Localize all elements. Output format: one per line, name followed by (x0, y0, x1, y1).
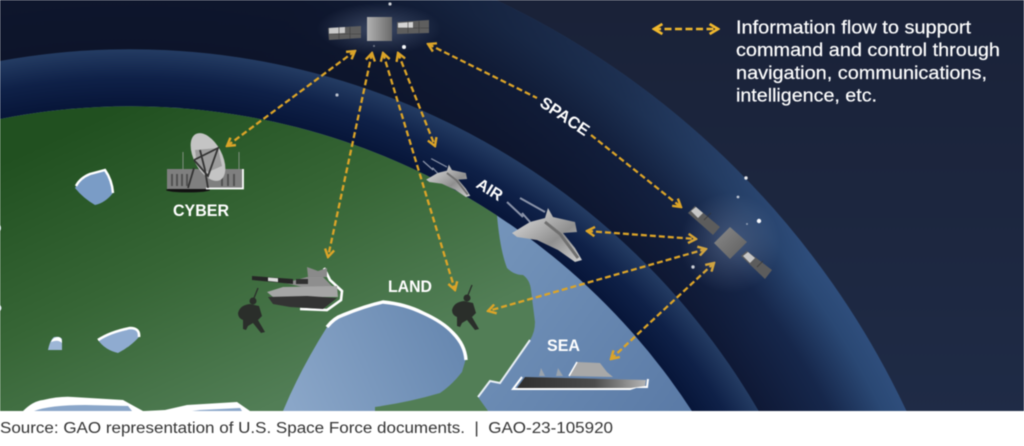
air layer band (0, 49, 759, 411)
icon: aircraft small (423, 159, 470, 197)
label: air: AIR (473, 176, 506, 205)
legend text: intelligence, etc. (736, 84, 877, 106)
legend arrow (654, 28, 718, 30)
land mass (0, 106, 535, 411)
icon: aircraft large (507, 198, 582, 262)
legend (654, 16, 1000, 106)
tank barrel (252, 276, 308, 284)
icon: soldier right (452, 285, 479, 330)
label: land: LAND (388, 277, 432, 296)
edge ice (0, 225, 2, 311)
arrow: satellite to aircraft (398, 53, 435, 146)
sea (0, 106, 692, 411)
arrow: satellite to cyber (227, 51, 355, 146)
right solar panel (397, 20, 429, 34)
satellite body (714, 227, 747, 259)
ship masts (539, 368, 563, 376)
legend text: command and control through (736, 39, 1000, 60)
stars (335, 2, 761, 269)
building (167, 169, 243, 189)
arrow: satellite to tank (328, 53, 372, 257)
source line: Source: GAO representation of U.S. Space Force documents. | GAO-23-105920 (0, 420, 613, 437)
arrow: satellite to ship (611, 263, 714, 359)
tank cupola (307, 267, 327, 277)
label: sea: SEA (547, 336, 580, 355)
lower solar panel (741, 251, 772, 279)
label: space: SPACE (536, 94, 593, 140)
arrow: satellite to satellite, upper part (428, 44, 537, 98)
lake 1 (75, 170, 113, 205)
icon: top satellite (317, 3, 441, 55)
ship superstructure (569, 362, 613, 377)
dish (183, 127, 233, 187)
satellite body (367, 17, 392, 41)
left solar panel (328, 26, 361, 40)
lake 3 (98, 328, 139, 353)
arrow: satellite to satellite, lower part (591, 135, 681, 207)
label: cyber: CYBER (173, 201, 229, 220)
arrow: satellite to soldier two (488, 249, 706, 311)
southern ice shelves (23, 397, 250, 411)
icon: tank (252, 267, 342, 310)
tank hull (267, 286, 338, 297)
upper solar panel (688, 206, 720, 235)
ship hull (517, 377, 646, 388)
lake 2 (48, 337, 62, 350)
icon: right satellite (680, 193, 780, 293)
tank outline (300, 268, 342, 310)
arrow: satellite to soldier (383, 53, 455, 290)
tank turret (285, 277, 333, 288)
icon: soldier left (238, 288, 265, 333)
legend text: navigation, communications, (736, 62, 987, 83)
antenna masts (183, 152, 239, 170)
information flow arrows (227, 51, 714, 359)
arrow: satellite to aircraft two (587, 231, 696, 239)
ground shadow (166, 188, 210, 192)
dish frame (188, 148, 218, 188)
legend text: Information flow to support (736, 16, 971, 38)
tank tracks (268, 296, 337, 309)
footer band (0, 411, 1024, 446)
legend text (736, 16, 1000, 106)
icon: ship (513, 362, 648, 389)
icon: satellite dish (166, 127, 243, 192)
dish interior (195, 148, 222, 172)
bay (283, 302, 467, 411)
ship outline (513, 377, 648, 389)
